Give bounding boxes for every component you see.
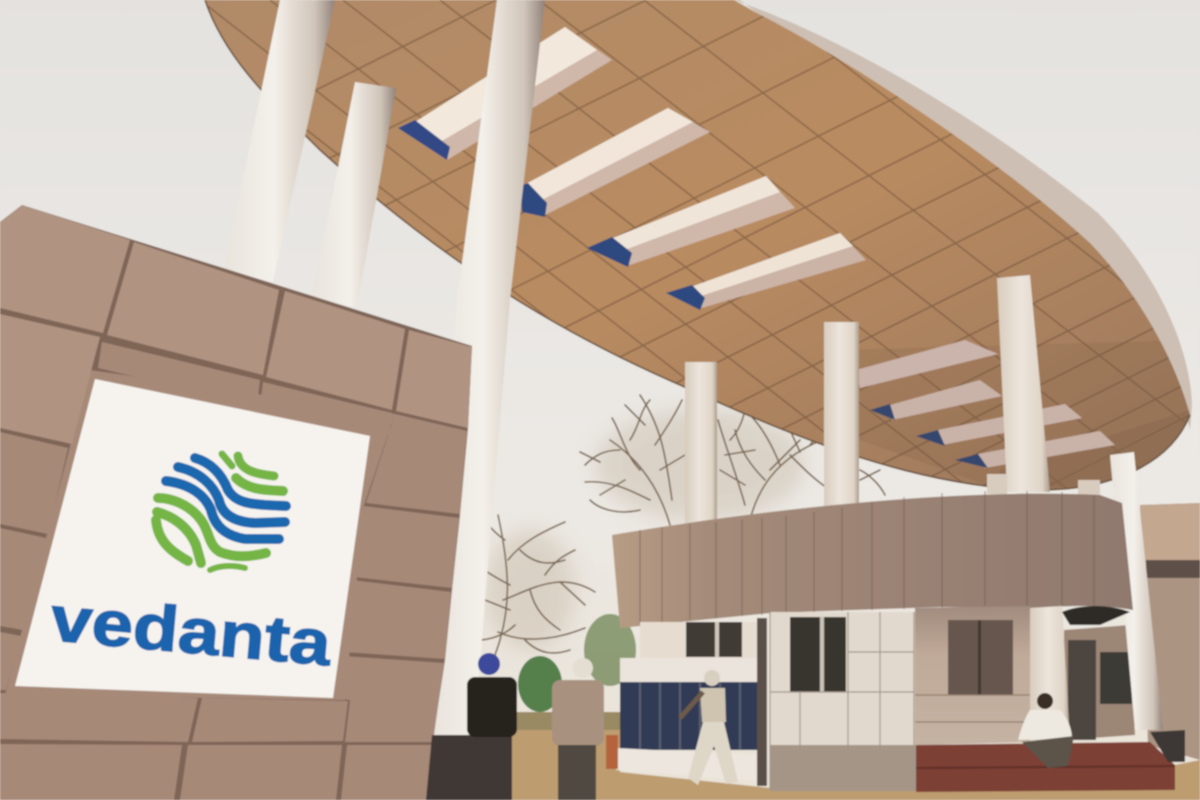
wordmark: vedanta bbox=[48, 582, 335, 679]
Vedanta globe logo bbox=[156, 454, 286, 570]
person walking away bbox=[552, 658, 604, 800]
ceiling tile grid bbox=[208, 0, 1188, 488]
seated man bbox=[1018, 693, 1074, 768]
skylights bbox=[398, 27, 1115, 468]
gatehouse bbox=[612, 491, 1185, 792]
ground bbox=[512, 730, 1200, 800]
dark cove shade bbox=[1051, 486, 1060, 488]
right side building bbox=[1064, 452, 1200, 760]
canopy rim bbox=[734, 0, 1192, 430]
lower walls bbox=[770, 612, 942, 790]
person in blue turban bbox=[467, 653, 517, 737]
gate bbox=[606, 618, 767, 786]
guard walking bbox=[680, 670, 738, 785]
pillars bbox=[224, 0, 1100, 735]
canopy bbox=[204, 0, 1192, 492]
green shrubs bbox=[512, 614, 636, 732]
sign plinth bbox=[0, 205, 512, 800]
plinth bbox=[770, 745, 916, 791]
curved fascia bbox=[612, 494, 1133, 628]
fascia shadow bbox=[1062, 606, 1130, 625]
steps bbox=[916, 742, 1175, 792]
people bbox=[467, 653, 1074, 800]
windows bbox=[686, 622, 742, 657]
wall panel lines bbox=[770, 612, 1030, 790]
background trees bbox=[476, 395, 885, 655]
round column bbox=[1030, 606, 1070, 740]
sign panel bbox=[15, 379, 370, 698]
